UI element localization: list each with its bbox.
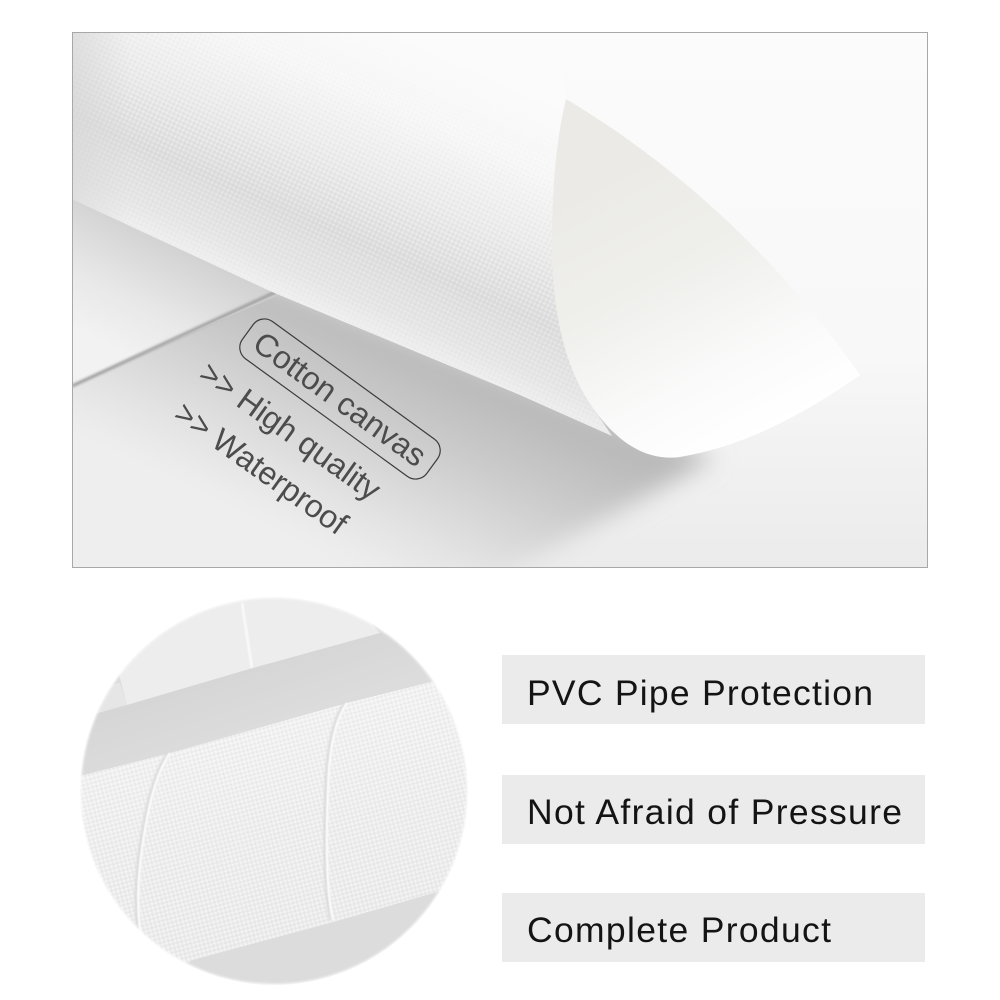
callout: Complete Product: Complete Product	[527, 910, 831, 950]
label: high quality: >> High quality	[193, 354, 388, 508]
callout: Not Afraid of Pressure: Not Afraid of Pressure	[527, 792, 902, 832]
label: cotton canvas pill: Cotton canvas	[247, 324, 433, 474]
callout: PVC Pipe Protection: PVC Pipe Protection	[527, 673, 873, 713]
wrapped canvas band	[80, 682, 468, 963]
callout: PVC Pipe Protection	[502, 655, 925, 724]
panel: circular close-up of PVC pipe	[70, 590, 480, 990]
sheet behind crease	[72, 199, 290, 385]
shadowed floor under the roll	[73, 295, 714, 566]
callout: Complete Product	[502, 893, 925, 962]
canvas roll	[72, 32, 612, 436]
grey gap band	[250, 668, 253, 669]
label: waterproof: >> Waterproof	[168, 394, 354, 542]
curled canvas corner	[552, 99, 860, 458]
panel: cotton canvas photo	[50, 32, 928, 600]
callout: Not Afraid of Pressure	[502, 775, 925, 844]
upper pipe block	[99, 598, 380, 712]
